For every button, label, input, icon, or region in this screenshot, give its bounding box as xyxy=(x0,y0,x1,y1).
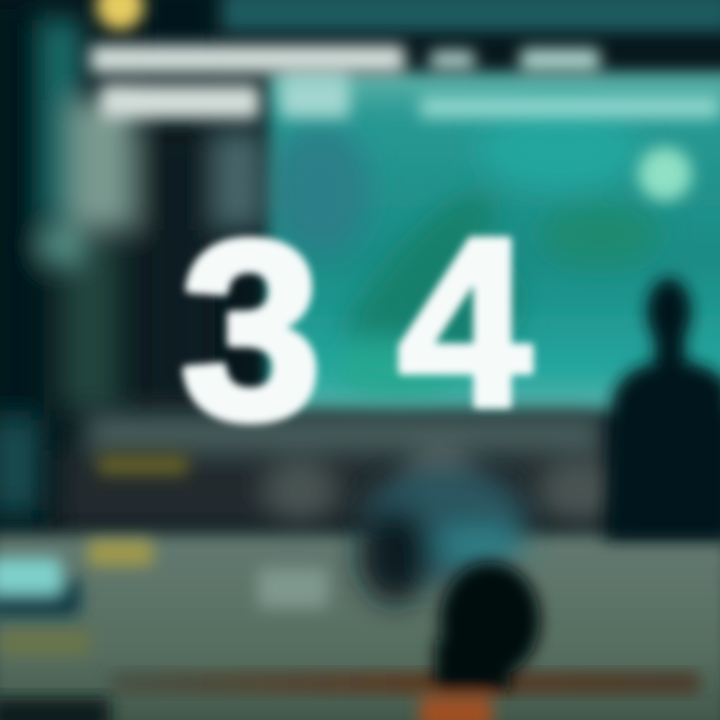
panel: lower dark band xyxy=(60,414,620,530)
panel: left column xyxy=(0,0,265,540)
accent: yellow marks xyxy=(0,455,328,655)
number: 4: 4 xyxy=(398,188,531,456)
icon: yellow light xyxy=(96,0,144,30)
silhouette: dark foreground shape xyxy=(420,562,540,720)
number: 3: 3 xyxy=(181,190,321,471)
panel: floor xyxy=(0,534,720,720)
icon: teal block xyxy=(0,558,80,616)
silhouette: person xyxy=(605,278,720,540)
panel: top dark band xyxy=(150,0,720,70)
heading bars xyxy=(90,45,720,119)
silhouette: central figure xyxy=(359,467,527,603)
panel: bottom dark corner xyxy=(0,698,110,720)
accent: red-brown line xyxy=(110,672,700,694)
icon: glowing circle xyxy=(638,147,692,201)
panel: teal backdrop xyxy=(268,72,720,412)
